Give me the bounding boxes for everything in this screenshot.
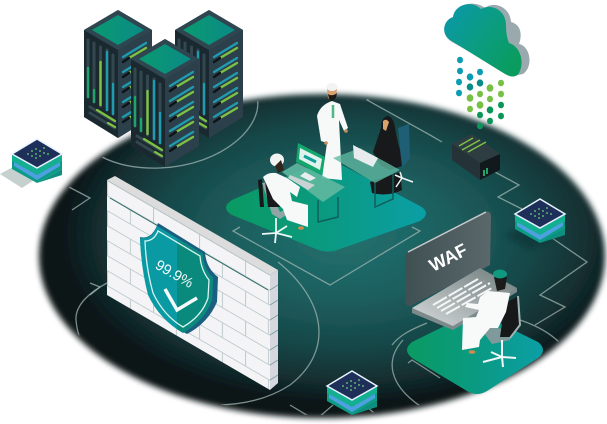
network box bbox=[452, 134, 500, 180]
server rack: right bbox=[175, 10, 243, 138]
data stack: right bbox=[505, 199, 565, 250]
shield percentage: 99.9% bbox=[152, 257, 196, 292]
data stack: left bbox=[0, 139, 62, 188]
desk: woman bbox=[333, 145, 400, 207]
data stack: bottom bbox=[327, 371, 377, 415]
brick wall bbox=[107, 176, 278, 390]
circuit lines bbox=[67, 97, 587, 420]
WAF label: WAF bbox=[426, 240, 471, 276]
person: woman at laptop bbox=[370, 116, 413, 194]
platform: WAF operator bbox=[407, 314, 543, 394]
platform: office bbox=[226, 161, 426, 252]
person: seated man bbox=[258, 154, 308, 243]
shield check mark bbox=[165, 289, 197, 310]
shield: 99.9% bbox=[140, 223, 218, 334]
desk: seated man bbox=[282, 143, 345, 222]
WAF screen bbox=[405, 212, 491, 306]
server rack: middle bbox=[131, 39, 199, 167]
WAF keyboard console bbox=[412, 268, 517, 330]
person: standing man bbox=[317, 83, 348, 180]
server rack: left bbox=[84, 10, 152, 138]
ground ellipse bbox=[39, 94, 605, 418]
cloud with rain bbox=[444, 4, 530, 129]
person: WAF operator bbox=[462, 270, 520, 367]
